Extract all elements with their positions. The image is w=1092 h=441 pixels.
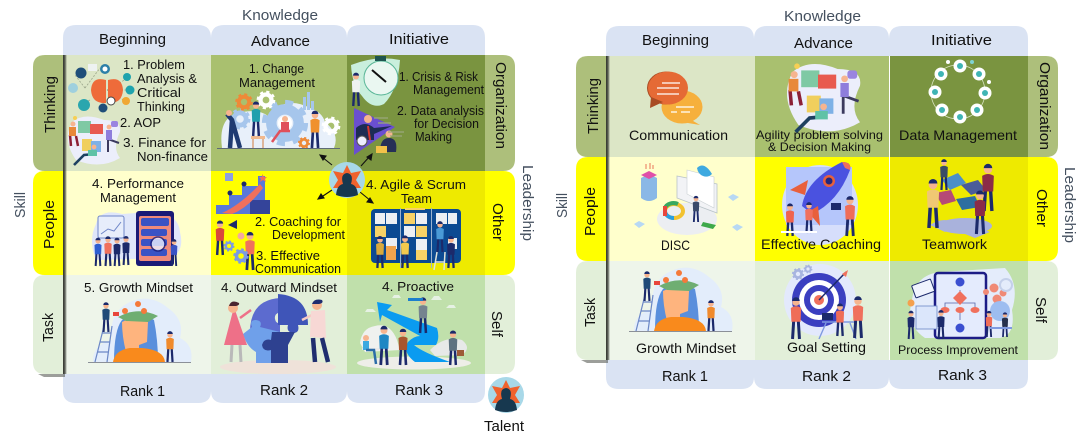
row labels left: Task xyxy=(583,297,599,327)
arrows from talent icon xyxy=(318,154,373,203)
text: change management: 1. Change xyxy=(249,61,304,76)
rank labels: Rank 1 xyxy=(662,369,708,385)
icon: agility puzzle team xyxy=(787,63,860,132)
rank labels xyxy=(120,383,443,400)
text: agility problem solving: Agility problem solving xyxy=(756,128,883,142)
text: change management xyxy=(239,61,315,90)
text: beginning thinking skills: 3. Finance for xyxy=(123,135,207,150)
text: agile and scrum team xyxy=(366,177,466,206)
icon: talent legend xyxy=(488,377,524,413)
row labels right: Organization xyxy=(1036,62,1052,150)
rank footers xyxy=(606,360,1028,389)
row tabs right xyxy=(485,55,515,374)
text: beginning thinking skills xyxy=(120,57,208,164)
rank labels xyxy=(662,368,987,385)
text: beginning thinking skills: 2. AOP xyxy=(120,115,161,130)
text: change management: Management xyxy=(239,75,315,90)
text: performance management xyxy=(92,176,184,205)
icon: scrum board xyxy=(371,208,461,270)
icon: teamwork puzzle xyxy=(927,159,994,238)
column titles xyxy=(99,32,449,50)
row tabs right xyxy=(1028,56,1058,360)
text: beginning thinking skills: Non-finance xyxy=(137,149,208,164)
row labels right xyxy=(488,62,508,338)
row labels left xyxy=(583,78,602,327)
text: initiative organization skills: for Decision xyxy=(414,116,479,131)
column titles: Advance xyxy=(251,34,310,50)
column titles: Beginning xyxy=(642,33,709,49)
text: outward mindset: 4. Outward Mindset xyxy=(221,280,337,295)
icon: brain with data nodes xyxy=(68,64,134,112)
text: teamwork: Teamwork xyxy=(922,236,988,252)
row labels right: Other xyxy=(1033,189,1049,227)
row labels right: Self xyxy=(488,311,504,338)
text: agile and scrum team: 4. Agile & Scrum xyxy=(366,177,466,192)
text: coaching and communication: Development xyxy=(272,227,345,242)
text: initiative organization skills: Making xyxy=(415,129,452,144)
row tabs left xyxy=(576,56,606,360)
icon: outward mindset puzzle head xyxy=(220,294,336,374)
icon: proactive path illustration xyxy=(357,295,471,370)
text: beginning thinking skills: Thinking xyxy=(137,99,185,114)
text: initiative organization skills xyxy=(397,69,484,144)
axis title: skill: Skill xyxy=(555,193,571,218)
row labels right: Other xyxy=(489,203,505,241)
column titles xyxy=(642,33,992,52)
text: growth mindset: 5. Growth Mindset xyxy=(84,280,193,295)
text: beginning thinking skills: 1. Problem xyxy=(123,57,185,72)
text: coaching and communication: 2. Coaching for xyxy=(255,214,342,229)
icon: crisis gauge and data analysts xyxy=(351,56,404,155)
icon: change management gears xyxy=(217,92,340,148)
column titles: Advance xyxy=(794,36,853,52)
row labels left: People xyxy=(42,200,58,249)
icon: goal setting target xyxy=(784,264,863,339)
text: beginning thinking skills: Critical xyxy=(137,85,181,100)
axis title: knowledge: Knowledge xyxy=(784,9,861,25)
row labels left: Thinking xyxy=(43,76,59,133)
text: beginning thinking skills: Analysis & xyxy=(137,71,197,86)
row labels right: Self xyxy=(1032,297,1048,324)
text: agile and scrum team: Team xyxy=(401,191,432,206)
row labels left: People xyxy=(583,187,599,236)
axis title: knowledge: Knowledge xyxy=(242,8,318,24)
column titles: Initiative xyxy=(931,33,992,49)
rank labels: Rank 1 xyxy=(120,384,165,400)
icon: data management ring xyxy=(928,60,992,124)
label: talent: Talent xyxy=(484,419,524,435)
text: agility problem solving xyxy=(756,128,883,154)
text: performance management: Management xyxy=(100,190,176,205)
text: performance management: 4. Performance xyxy=(92,176,184,191)
column headers xyxy=(63,25,485,55)
column headers xyxy=(606,26,1028,56)
text: process improvement: Process Improvement xyxy=(898,343,1019,357)
icon: DISC analytics isometric xyxy=(634,163,743,235)
icon: growth mindset illustration xyxy=(88,299,192,362)
column titles: Beginning xyxy=(99,32,166,48)
row labels right xyxy=(1032,62,1052,324)
text: proactive: 4. Proactive xyxy=(382,279,454,294)
text: DISC: DISC xyxy=(661,237,690,253)
row labels left: Thinking xyxy=(586,78,602,134)
rank footers xyxy=(63,374,485,403)
text: initiative organization skills: 1. Crisis & Risk xyxy=(399,69,478,84)
panel: left skill matrix xyxy=(13,8,535,435)
text: coaching and communication: 3. Effective xyxy=(256,248,320,263)
icon: process improvement flowchart xyxy=(907,268,1015,339)
icon: performance review tablet xyxy=(92,211,181,266)
grid cells xyxy=(63,55,485,374)
icon: coaching stairs and speakers xyxy=(216,173,270,270)
icon: growth mindset illustration xyxy=(629,268,733,332)
icon: communication speech bubbles xyxy=(647,72,702,125)
text: data management: Data Management xyxy=(899,127,1017,143)
panel: right skill matrix xyxy=(555,9,1077,389)
rank labels: Rank 2 xyxy=(260,383,308,399)
icon: talent badge center xyxy=(329,162,365,198)
row labels left xyxy=(41,76,59,342)
text: communication: Communication xyxy=(629,127,728,143)
text: agility problem solving: & Decision Making xyxy=(768,140,871,154)
text: coaching and communication: Communication xyxy=(255,261,341,276)
column titles: Initiative xyxy=(389,32,449,48)
rank labels: Rank 3 xyxy=(938,368,987,384)
text: growth mindset: Growth Mindset xyxy=(636,340,736,356)
axis title: leadership: Leadership xyxy=(1061,167,1077,243)
grid cells xyxy=(606,56,1028,360)
text: initiative organization skills: 2. Data analysis xyxy=(397,103,484,118)
axis title: skill: Skill xyxy=(13,192,29,218)
rank labels: Rank 3 xyxy=(395,383,443,399)
icon: effective coaching rocket xyxy=(781,162,858,245)
row labels right: Organization xyxy=(492,62,508,149)
axis title: leadership: Leadership xyxy=(519,165,535,241)
text: effective coaching: Effective Coaching xyxy=(761,236,881,252)
row labels left: Task xyxy=(41,312,57,342)
row tabs left xyxy=(33,55,63,374)
text: goal setting: Goal Setting xyxy=(787,339,866,355)
text: initiative organization skills: Management xyxy=(413,82,484,97)
rank labels: Rank 2 xyxy=(802,369,851,385)
text: coaching and communication xyxy=(255,214,345,276)
icon: puzzle team xyxy=(68,116,120,165)
